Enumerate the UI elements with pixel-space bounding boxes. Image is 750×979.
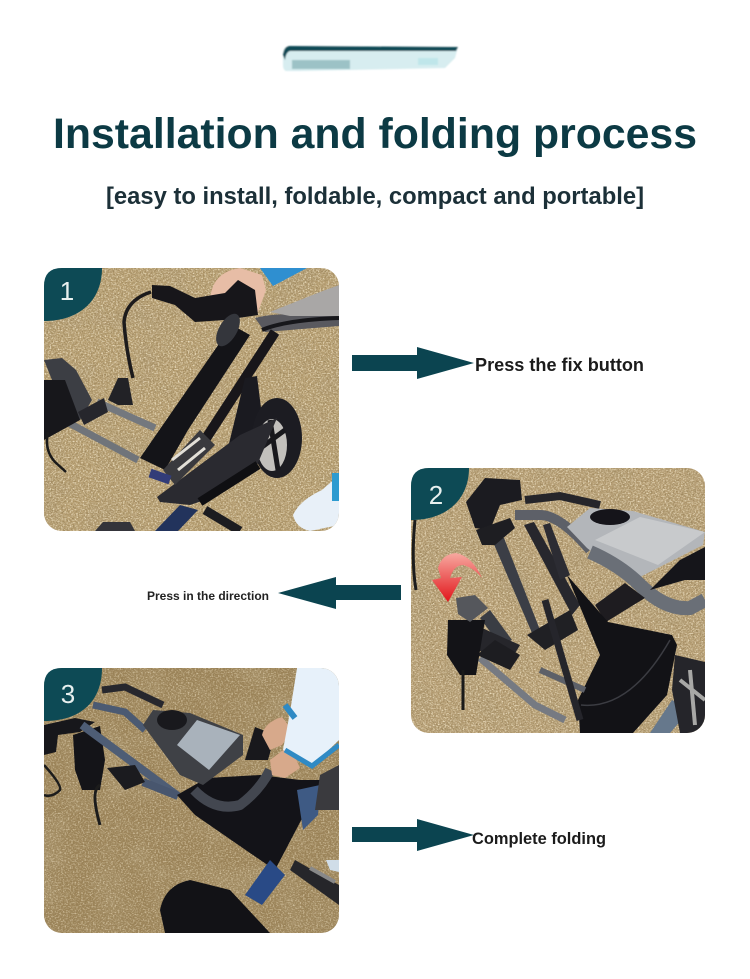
label: complete folding: Complete folding xyxy=(472,829,606,848)
icon: red curved arrow xyxy=(432,553,482,602)
arrow to step 1 label xyxy=(352,347,474,379)
number badge 2 xyxy=(411,468,469,520)
photo panel 3 xyxy=(44,668,339,933)
photo panel 1 xyxy=(44,268,340,531)
number badge 3 xyxy=(44,668,102,721)
label: press the fix button: Press the fix button xyxy=(475,355,644,375)
title: Installation and folding process xyxy=(53,110,697,158)
number badge 3: 3 xyxy=(61,679,75,709)
arrow to step 3 label xyxy=(352,819,474,851)
subtitle: [easy to install, foldable, compact and portable] xyxy=(106,183,644,210)
number badge 2: 2 xyxy=(429,480,443,510)
photo panel 2 xyxy=(411,468,705,733)
number badge 1: 1 xyxy=(60,276,74,306)
number badge 1 xyxy=(44,268,102,321)
arrow to step 2 label xyxy=(278,577,401,609)
label: press in the direction: Press in the direction xyxy=(147,591,269,603)
logo smudge xyxy=(283,46,458,71)
